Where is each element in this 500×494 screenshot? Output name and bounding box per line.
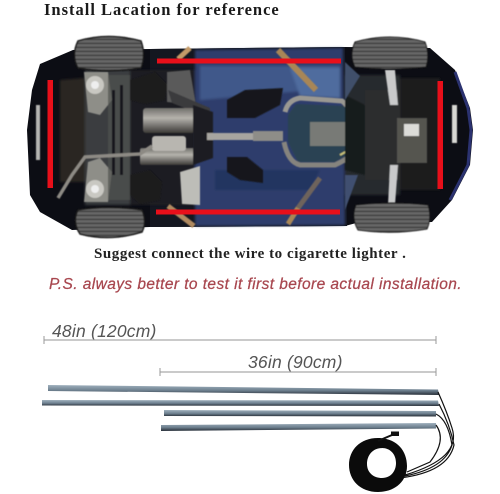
red strip: left bbox=[48, 80, 53, 188]
mufflers bbox=[143, 108, 195, 133]
left black brackets bbox=[130, 72, 168, 104]
black panels bbox=[227, 88, 283, 118]
heat shields bbox=[167, 70, 196, 105]
wiring suggestion text: Suggest connect the wire to cigarette lighter . bbox=[94, 246, 406, 262]
right section bbox=[345, 95, 365, 175]
strip 4 bbox=[161, 423, 436, 431]
car underbody diagram bbox=[27, 36, 473, 238]
wheel: rear right bbox=[354, 203, 430, 232]
strip 2 bbox=[42, 400, 439, 406]
red strip: bottom bbox=[156, 210, 340, 214]
wheel: rear left bbox=[75, 208, 144, 238]
engine and exhaust parts bbox=[36, 62, 457, 210]
center pipe bbox=[207, 133, 253, 140]
strip 1 bbox=[48, 385, 439, 395]
dimension: 36in bbox=[160, 352, 436, 376]
strip 3 bbox=[164, 410, 436, 416]
red strip: right bbox=[438, 81, 443, 189]
tan straps bbox=[168, 48, 320, 226]
LED strips bbox=[42, 385, 439, 431]
dimension: 36in: 36in (90cm) bbox=[248, 352, 343, 372]
tailpipe bbox=[58, 146, 152, 198]
wheel: front right bbox=[352, 37, 428, 69]
title: Install Lacation for reference bbox=[44, 0, 280, 19]
cable coil bbox=[349, 438, 407, 492]
wheel: front left bbox=[74, 36, 144, 70]
dimension: 48in bbox=[44, 321, 436, 344]
car body bbox=[27, 47, 473, 230]
test note: P.S. always better to test it first before actual installation. bbox=[49, 276, 462, 293]
wires and coil bbox=[349, 392, 454, 492]
center plate bbox=[193, 105, 213, 165]
rear loop interior bbox=[288, 104, 358, 162]
left suspension bbox=[84, 72, 112, 115]
dimension: 48in: 48in (120cm) bbox=[52, 321, 157, 341]
red strip: top bbox=[157, 58, 341, 64]
